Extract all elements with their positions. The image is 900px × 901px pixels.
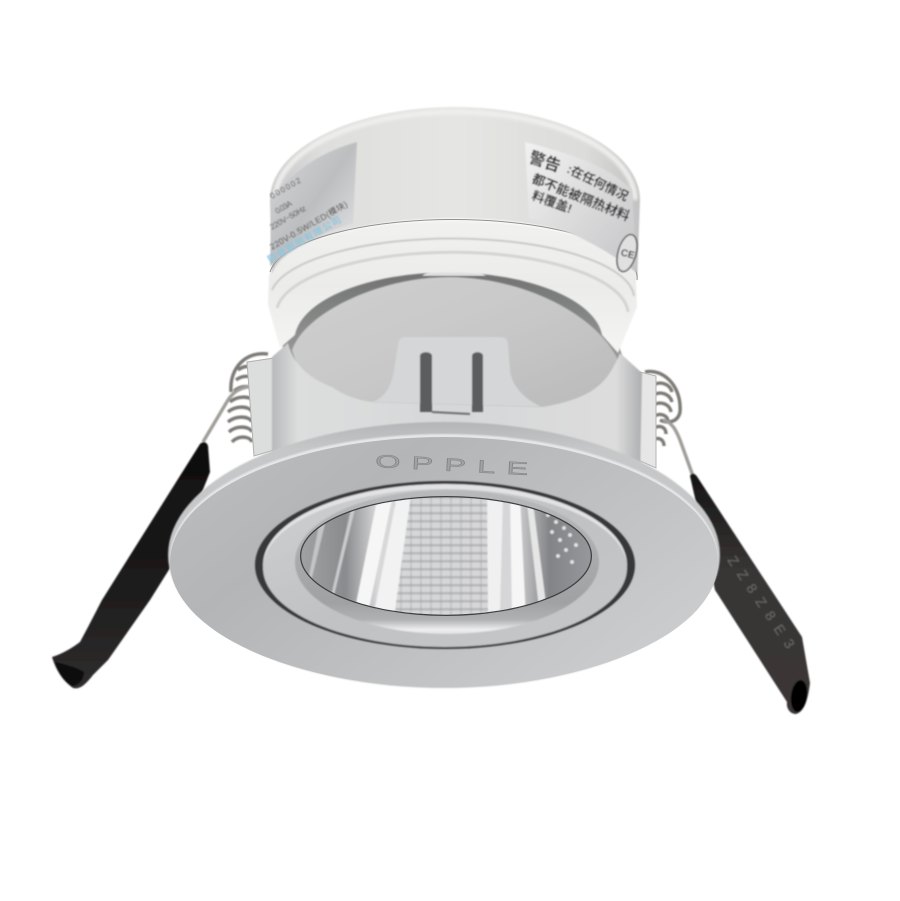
collar bands <box>268 221 637 353</box>
label text: 欧普照明有限公司 <box>266 214 343 266</box>
product photo: recessed LED downlight <box>51 106 811 715</box>
left rating label <box>266 142 357 266</box>
right black strap <box>690 474 810 714</box>
label text: 000002 <box>268 176 303 201</box>
ring body <box>263 489 627 647</box>
left strap body <box>52 442 210 688</box>
left bracket post <box>247 358 274 456</box>
label sheet <box>525 142 637 273</box>
flange rim <box>168 422 720 688</box>
right spring coil <box>645 371 680 446</box>
warning text: :在任何情况 <box>565 161 632 204</box>
right strap body <box>690 474 810 714</box>
adjustable inner ring <box>255 481 635 649</box>
cavity inner glint <box>422 268 486 276</box>
label text: 220V~50Hz <box>268 204 308 232</box>
right spring wire <box>663 420 693 476</box>
right strap open end <box>789 679 809 713</box>
warning text <box>527 149 632 224</box>
LED reflector <box>298 494 594 618</box>
left slot <box>420 352 432 412</box>
right facet dots <box>546 513 578 564</box>
reflector lip <box>295 490 599 634</box>
label text: 220V-0.5W/LED(模块) <box>268 199 349 252</box>
bright vertical facets <box>306 495 548 618</box>
brushed face <box>170 437 718 687</box>
cavity dark band <box>282 262 622 410</box>
rim highlight <box>170 434 718 684</box>
reflector base <box>298 494 594 618</box>
can top rim highlight <box>275 112 635 200</box>
label text <box>266 176 349 266</box>
flange face <box>170 434 718 687</box>
right strap print: ZZ8Z8E3 <box>725 553 798 651</box>
can lower seam <box>270 219 637 280</box>
left spring coil <box>228 354 268 442</box>
cavity plate <box>292 277 618 410</box>
left spring clip <box>203 354 268 442</box>
certification mark: CE <box>619 248 636 262</box>
left black strap <box>52 442 210 688</box>
OPPLE logo: OPPLE <box>375 451 529 479</box>
can body <box>270 107 640 282</box>
tongue bottom <box>432 411 470 415</box>
white collar <box>268 221 637 353</box>
right slot <box>472 352 483 412</box>
tab base <box>372 337 542 407</box>
warning text: 警告 <box>527 149 563 176</box>
right warning label <box>525 142 641 274</box>
housing <box>272 343 642 480</box>
warning text: 都不能被隔热材料 <box>530 171 632 224</box>
bottom shadow edge <box>300 496 592 616</box>
fine facet grid <box>395 497 488 614</box>
left strap open end <box>55 662 84 686</box>
left spring wire <box>203 386 250 442</box>
label text: 0.03A <box>274 199 294 216</box>
ring highlight <box>263 484 627 646</box>
label sheet <box>270 142 357 266</box>
right spring clip <box>645 371 693 476</box>
dark groove <box>255 481 635 649</box>
right bracket post <box>638 372 656 468</box>
warning text: 料覆盖! <box>530 188 574 216</box>
center tab with slots <box>372 337 542 415</box>
